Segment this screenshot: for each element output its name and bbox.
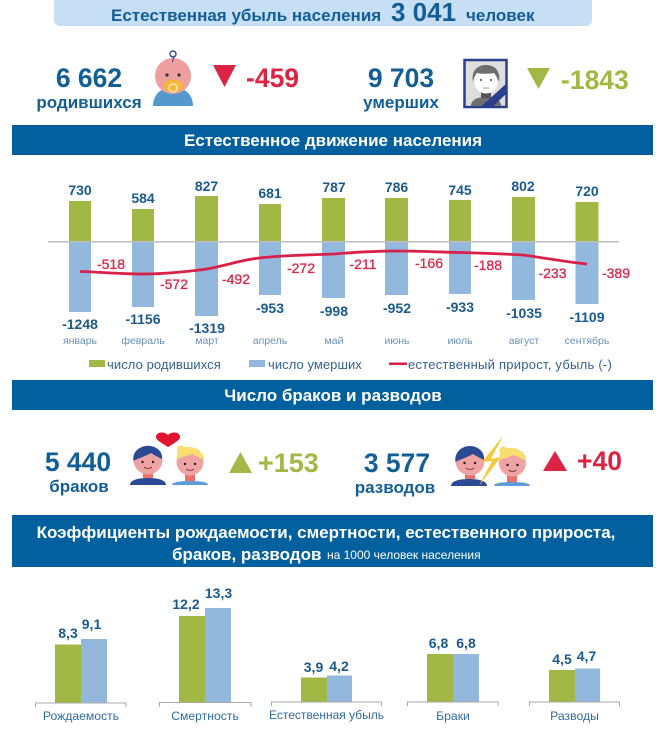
chart legend: число умерших — [268, 357, 362, 372]
births values: 720 — [575, 183, 599, 199]
deaths change — [527, 65, 629, 95]
births figure: родившихся — [36, 93, 142, 112]
increase values: -166 — [415, 255, 443, 271]
chart: death rate: 12,2 — [172, 596, 200, 612]
chart: natural decrease: 4,2 — [329, 658, 349, 674]
increase values: -272 — [287, 260, 315, 276]
births bars — [69, 196, 598, 242]
births values: 787 — [322, 179, 346, 195]
deaths values: -1319 — [189, 320, 225, 336]
chart: divorces: Разводы — [550, 709, 599, 723]
births figure — [36, 63, 142, 112]
divorces figure: 3 577 — [364, 448, 430, 478]
divorces change: +40 — [577, 446, 622, 476]
divorces change — [543, 446, 622, 476]
increase values: -572 — [160, 276, 188, 292]
chart: marriages: Браки — [436, 709, 470, 723]
month labels: август — [509, 335, 539, 347]
deaths values: -952 — [383, 300, 411, 316]
monthly bar and line chart — [48, 178, 630, 347]
chart legend — [89, 357, 612, 372]
marriages change: +153 — [258, 448, 319, 478]
section header: rates per 1000 — [12, 515, 653, 567]
month labels: февраль — [121, 335, 165, 347]
deaths values: -1156 — [125, 311, 161, 327]
marriages change — [229, 448, 319, 478]
births values: 681 — [258, 185, 282, 201]
deaths values: -1035 — [506, 305, 542, 321]
month labels — [63, 335, 610, 347]
deaths values: -998 — [320, 303, 348, 319]
section header: natural movement — [12, 125, 653, 155]
icon: memorial portrait — [464, 60, 507, 107]
deaths figure: 9 703 — [368, 63, 434, 93]
month labels: сентябрь — [565, 335, 610, 347]
increase values: -233 — [538, 265, 567, 281]
chart: natural decrease — [269, 658, 384, 722]
chart: divorces — [530, 648, 620, 723]
month labels: июнь — [384, 335, 410, 347]
chart: natural decrease: Естественная убыль — [269, 708, 384, 722]
chart legend: естественный прирост, убыль (-) — [408, 357, 612, 372]
divorces figure: разводов — [355, 478, 435, 497]
month labels: апрель — [253, 335, 288, 347]
icon: baby — [153, 51, 193, 106]
increase values: -518 — [97, 256, 125, 272]
births values: 730 — [68, 182, 92, 198]
month labels: май — [325, 335, 344, 347]
section header: rates per 1000: на 1000 человек населения — [327, 548, 481, 562]
deaths values: -953 — [256, 300, 284, 316]
chart: marriages — [408, 635, 498, 723]
births values: 786 — [385, 179, 408, 195]
births values: 584 — [131, 190, 155, 206]
section header: marriages and divorces: Число браков и разводов — [224, 386, 442, 405]
chart: marriages: 6,8 — [456, 635, 476, 651]
section header: natural movement: Естественное движение населения — [184, 131, 482, 150]
chart: birth rate: 8,3 — [58, 625, 78, 641]
chart: birth rate: Рождаемость — [43, 709, 119, 723]
section header: rates per 1000: Коэффициенты рождаемости, смертности, естественного прироста, — [37, 523, 615, 542]
top banner: natural decrease: человек — [466, 6, 535, 25]
deaths values: -1109 — [569, 309, 605, 325]
chart: divorces: 4,5 — [552, 651, 572, 667]
deaths values — [62, 299, 605, 336]
births figure: 6 662 — [56, 63, 122, 93]
births values: 827 — [195, 178, 218, 194]
divorces figure — [355, 448, 435, 497]
month labels: январь — [63, 335, 98, 347]
deaths change: -1843 — [561, 65, 629, 95]
increase values — [97, 255, 630, 292]
marriages figure: 5 440 — [45, 447, 111, 477]
increase values: -389 — [602, 265, 630, 281]
section header: rates per 1000: браков, разводов — [172, 545, 321, 564]
deaths bars — [69, 242, 598, 316]
month labels: июль — [447, 335, 473, 347]
increase values: -188 — [474, 257, 502, 273]
births values — [68, 178, 599, 206]
icon: couple with heart — [130, 433, 208, 485]
section header: marriages and divorces — [12, 380, 653, 410]
deaths figure — [363, 63, 439, 112]
births values: 802 — [511, 178, 535, 194]
chart: death rate: Смертность — [171, 709, 239, 723]
chart: birth rate: 9,1 — [82, 616, 101, 632]
births change: -459 — [246, 63, 299, 93]
chart: death rate: 13,3 — [205, 585, 232, 601]
chart: death rate — [160, 585, 251, 723]
births values: 745 — [448, 182, 472, 198]
chart: divorces: 4,7 — [577, 648, 596, 664]
chart: marriages: 6,8 — [429, 635, 448, 651]
increase values: -492 — [222, 271, 250, 287]
marriages figure — [45, 447, 111, 496]
top banner: natural decrease: Естественная убыль населения — [111, 6, 381, 25]
chart: natural decrease: 3,9 — [304, 659, 323, 675]
deaths values: -1248 — [62, 316, 98, 332]
top banner: natural decrease — [54, 0, 592, 27]
chart: birth rate — [36, 616, 126, 723]
increase values: -211 — [350, 256, 377, 272]
deaths figure: умерших — [363, 93, 439, 112]
chart legend: число родившихся — [107, 357, 221, 372]
deaths values: -933 — [446, 299, 474, 315]
month labels: март — [195, 335, 219, 347]
icon: couple with lightning — [451, 436, 530, 486]
line: natural increase — [80, 251, 587, 274]
marriages figure: браков — [49, 477, 109, 496]
births change — [213, 63, 299, 93]
